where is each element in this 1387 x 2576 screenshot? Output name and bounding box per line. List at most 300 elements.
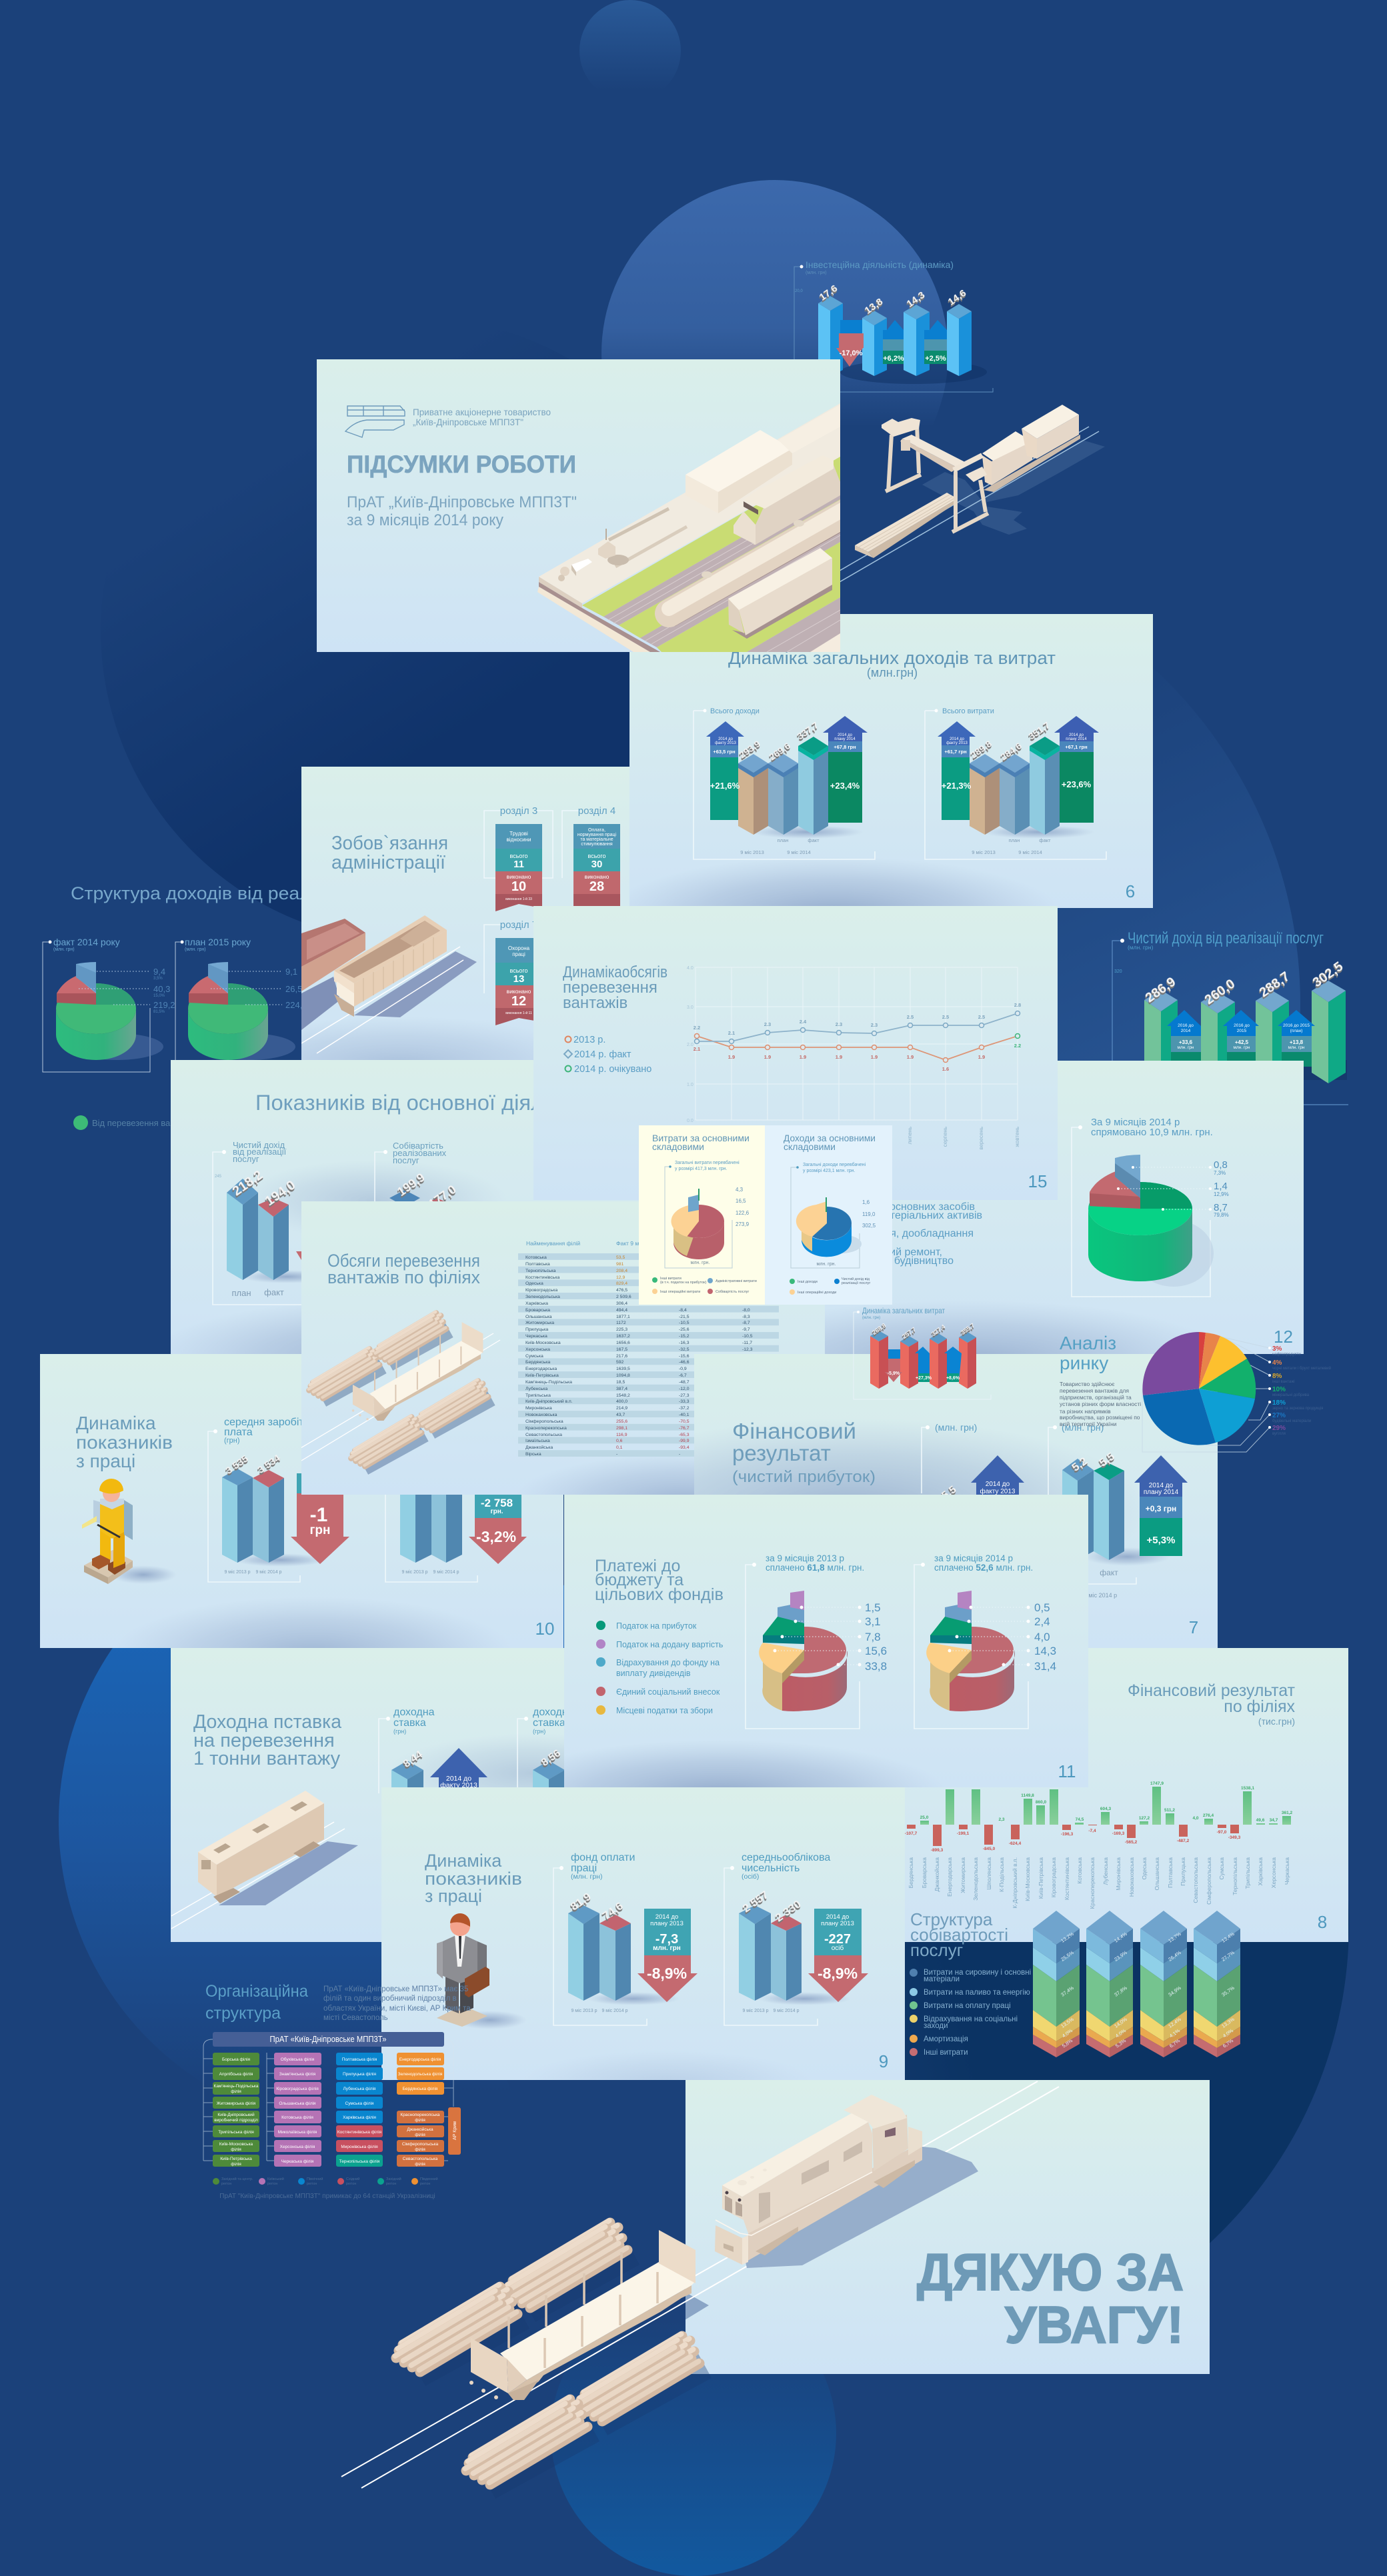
table of branches: 255,6 [616,1419,627,1424]
pie legend: вугілля [1272,1432,1286,1436]
table of branches: 306,4 [616,1301,627,1306]
floating chart: investment dynamics [794,259,993,392]
table of branches: -0,9 [679,1367,687,1371]
chart: fact vs 2013 [922,1422,1024,1502]
legend: Амортизація [924,2035,968,2043]
pie legend: зерно та зернова продукція [1272,1407,1323,1411]
chart: rate vs plan: (грн) [533,1728,545,1735]
chart: total expenses: 9 міс 2013 [972,849,996,855]
chart: total income: +67,8 грн [834,744,856,750]
table of branches: Севастопольська [525,1433,562,1437]
stacked bar percentages: 6,7% [1222,2037,1234,2049]
table of branches: 208,4 [616,1269,627,1273]
legend: Інші витрати [924,2049,968,2057]
table of branches: Херсонська [525,1347,550,1352]
bar chart: -899,3 [931,1848,944,1853]
heading [910,1909,1008,1960]
chart: average headcount: 9 міс 2014 р [773,2008,800,2013]
floating block: market analysis [1060,1332,1331,1452]
page number: 7 [1189,1617,1198,1637]
pie: fact 2014 [43,937,175,1072]
bar chart: -169,3 [1112,1831,1125,1836]
arrow callout: minus one hryvnia: -1 [310,1504,327,1526]
table of branches: 476,5 [616,1288,627,1293]
wagon shadow [685,2292,709,2320]
legend: Витрати на оплату праці [924,2002,1011,2010]
legends [652,1277,870,1295]
table of branches: 1172 [616,1321,626,1325]
table of branches: -70,5 [679,1419,689,1424]
column 3 branches: Харківська філія [343,2115,376,2120]
table of branches: -8,0 [742,1308,750,1313]
table of branches: -27,3 [679,1393,689,1398]
line chart: 2.1 [694,1046,700,1052]
org connectors [203,2039,453,2161]
expenses chart: 122,6 [736,1210,750,1216]
section 4 card: виконано [585,873,609,880]
line chart: 1.9 [871,1054,878,1060]
branch names: Шполянська [986,1857,992,1890]
chart: nine months 2014: 4,0 [1034,1631,1050,1643]
column 1 branches: Кам'янець-Подільська [214,2083,259,2089]
table of branches: -10,5 [679,1321,689,1325]
heading: 1 тонни вантажу [193,1748,341,1769]
column 4 branches: філія [415,2147,425,2152]
heading: з праці [425,1886,482,1906]
chart: average headcount: 2 330 [773,1898,804,1924]
paragraph: всій території України [1060,1421,1117,1427]
table of branches: -93,4 [679,1445,689,1450]
stacked bar percentages: 13,7% [1167,1931,1182,1944]
locomotive [754,465,840,545]
table of branches: Лубенська [525,1386,547,1391]
stacked bars [1033,1911,1240,2057]
chart: net income from services: від реалізації [233,1147,287,1157]
growth arrows: 2016 до 2015 [1283,1023,1310,1028]
arrow callout: minus 3.2 percent: -2 758 [481,1497,513,1509]
chart: rate vs plan: доходна [533,1707,574,1718]
org legend: Південний [420,2177,438,2181]
paragraph: установ різних форм власності [1060,1401,1141,1407]
branch names: Трипільська [1244,1857,1251,1889]
page number: 15 [1028,1171,1047,1191]
callout: payroll change: плану 2013 [650,1920,683,1927]
table of branches: Миронівська [525,1405,552,1411]
chart: fact vs 2013: (млн. грн) [935,1422,977,1433]
subtitle [347,493,577,529]
expenses chart: 16,5 [736,1198,746,1204]
line chart: 2.5 [978,1014,985,1020]
table of branches: 1877,1 [616,1315,630,1319]
value labels: 127,2 [1139,1816,1150,1821]
heading: показників [76,1432,173,1453]
chart: total income: 337,7 [795,719,820,742]
bar chart: -196,3 [1061,1832,1074,1837]
floating chart: net income [1112,929,1348,1105]
line chart: 2.5 [907,1014,914,1020]
chart: nine months 2013: 33,8 [865,1660,887,1673]
heading: ринку [1060,1353,1108,1373]
heading [595,1557,724,1604]
chart: nine months 2013: за 9 місяців 2013 р [766,1553,844,1563]
bar chart: -624,4 [1009,1841,1022,1846]
table of branches: 217,6 [616,1354,627,1359]
legend: Від перевезення вантажів [92,1118,196,1128]
section 7 card: 13 [513,973,524,985]
income heading [784,1133,876,1152]
chart: total expenses: плану 2014 [1066,737,1087,741]
table of branches: Факт 9 міс [616,1240,643,1247]
line chart: 1.9 [728,1054,735,1060]
income heading: складовими [784,1141,836,1152]
arrow callout: minus 3.2 percent [469,1495,527,1564]
chart: total expenses: 351,7 [1026,719,1052,742]
line chart: 1.0 [687,1083,694,1087]
heading: Структура [910,1909,993,1929]
section 7 card: 12 [511,994,526,1009]
bar values: 14,6 [946,287,968,308]
pie: plan 2015: 9,1 [285,967,297,977]
stacked bar percentages: 26,4% [1167,1949,1182,1963]
value labels: 4,0 [1192,1816,1199,1821]
arrow callout: plus 5.3 percent: 2014 до [1149,1482,1174,1489]
expenses heading: складовими [652,1141,704,1152]
chart: total income: плану 2014 [834,737,856,741]
floating chart: total expenses dynamics: Динаміка загальних витрат [862,1306,945,1315]
chart: total income: 2014 до [838,733,853,737]
table of branches: 225,3 [616,1327,627,1332]
line chart: серпень [942,1127,948,1147]
table of branches: 116,9 [616,1433,627,1437]
chart: net income from services: Чистий дохід [233,1140,285,1150]
chart: second salary chart: 9 міс 2014 р [433,1569,459,1575]
bar values [1143,959,1346,1007]
column 3 branches: Костянтинівська філія [337,2129,382,2135]
chart: second salary chart: 9 міс 2013 р [401,1569,428,1575]
section 7 card: виконано [507,988,531,995]
heading [205,1982,308,2023]
column 1 branches [213,2053,259,2167]
heading: Організаційна [205,1982,308,2001]
floating chart: cost structure [910,1909,1240,2057]
table of branches: Сумська [525,1354,543,1359]
column 3 branches: Полтавська філія [342,2057,377,2062]
heading: (тис.грн) [1258,1716,1295,1727]
pie: plan 2015: план 2015 року [185,937,251,947]
value labels: 860,0 [1036,1800,1047,1805]
slide 7: financial result [560,1354,1218,1648]
bar chart: -97,0 [1217,1830,1227,1835]
column 1 branches: Житомирська філія [217,2101,256,2106]
heading: Обсяги перевезення [327,1251,480,1271]
stacked bar percentages: 27,7% [1220,1949,1236,1963]
value labels: 34,7 [1270,1818,1278,1823]
chart: total income: 293,9 [737,738,762,761]
pie: plan 2015: (млн. грн) [185,947,206,952]
column 1 branches: Київ-Московська [219,2142,253,2147]
column 4 branches: Севастопольська [403,2157,438,2161]
paragraph: підприємств, організацій та [1060,1394,1132,1401]
table of branches: 1548,2 [616,1393,630,1398]
paragraph [1060,1381,1141,1427]
table of branches: -65,3 [679,1433,689,1437]
illustration: hopper wagons [301,915,477,1053]
heading: по філіях [1224,1697,1295,1716]
section 4 card: та матеріальне [580,837,613,842]
chart: average headcount [724,1852,851,2025]
table of branches: -12,3 [742,1347,753,1352]
column 1 branches: філія [231,2089,241,2094]
table of branches: Зеленодольська [525,1295,560,1299]
chart: fact vs plan [1048,1422,1170,1599]
head company box: ПрАТ «Київ-Дніпровське МПП3Т» [269,2034,387,2044]
column 2 branches: Ольшанська філія [279,2101,316,2106]
line chart: 1.9 [907,1054,914,1060]
section 7 bracket [484,925,501,993]
value labels: 74,5 [1076,1817,1084,1822]
page number: 12 [1274,1327,1293,1347]
slide: income rate per tonne [171,1648,694,1942]
chart: nine months 2014: сплачено 52,6 млн. грн. [934,1563,1033,1573]
small crane and crates [615,527,687,567]
legend [564,1035,651,1075]
bar chart [905,1781,1293,1909]
illustration: railway terminal [537,403,847,652]
table of branches: 829,4 [616,1281,627,1286]
heading [331,833,448,873]
heading: показників [425,1869,522,1889]
axis frame [794,267,993,392]
small panel: expenses and income by components [639,1125,892,1305]
callouts [836,320,947,367]
expenses heading: Витрати за основними [652,1133,750,1143]
section 3 card [495,824,542,911]
chart: total income: факт [808,837,820,843]
heading [76,1413,173,1471]
table of branches: -40,1 [679,1413,689,1417]
bar chart: -7,4 [1088,1829,1096,1833]
chart: total expenses: +21,3% [942,781,972,791]
chart: rate vs 2013 [379,1707,487,1793]
table of branches: -25,6 [679,1327,689,1332]
table of branches: 1637,2 [616,1334,630,1339]
chart: total income: +23,4% [830,781,860,791]
table of branches: -9,7 [742,1327,750,1332]
line chart: 2.3 [764,1021,771,1027]
line chart: 2.8 [1014,1002,1021,1008]
org legend: регіон [221,2182,231,2186]
chart: nine months 2013: 7,8 [865,1631,881,1643]
legend [596,1621,723,1715]
section 7 label: розділ 7 [500,919,537,931]
branch names: Сумська [1218,1857,1225,1879]
heading [1128,1681,1296,1727]
floating chart: total expenses dynamics: 327,4 [930,1323,946,1337]
pie: fact 2014: 81,5% [153,1010,165,1014]
heading: результат [732,1441,831,1465]
chart: fact vs plan: (млн. грн) [1062,1422,1104,1433]
thank-you text: УВАГУ! [1005,2295,1184,2354]
heading [732,1419,876,1486]
illustration: flat wagon with logs [301,1312,500,1467]
chart: average headcount: (осіб) [742,1873,759,1881]
head company box [213,2032,444,2047]
value labels: 25,0 [920,1815,929,1820]
list of investment types: та нематеріальних активів [852,1210,982,1221]
section 7 card [495,938,533,1025]
branch names: Зеленодольська [972,1857,979,1901]
chart: fact vs 2013: факту 2013 [980,1487,1016,1495]
bar values: 14,3 [905,289,927,310]
callout: payroll change: млн. грн [653,1945,681,1952]
chart: total expenses: 2014 до [1069,733,1084,737]
table of branches: 43,7 [616,1413,625,1417]
chart: nine months 2013: 1,5 [865,1601,881,1614]
section 4 bracket [562,811,579,878]
line chart: 2.2 [694,1025,700,1031]
org legend: регіон [346,2182,356,2186]
chart: cost of services [375,1141,459,1212]
bar values: 13,8 [863,296,885,317]
table of branches: Вірська [525,1451,541,1457]
table of branches: 494,4 [616,1308,627,1313]
stacked bar percentages: 13,2% [1060,1931,1075,1944]
table of branches: 12,9 [616,1275,625,1280]
table of branches: - [679,1452,680,1457]
legend: Податок на прибуток [616,1621,697,1631]
column 3 branches: Прилуцька філія [343,2071,376,2077]
branch names: Миронівська [1115,1857,1122,1891]
section 7 card: праці [512,951,525,957]
pie: fact 2014: 3,5% [153,977,163,981]
pie: plan 2015: 26,5 [285,984,302,994]
callouts: +2,5% [925,355,946,363]
list of investment types: Капітальний ремонт, [841,1247,942,1258]
growth arrows: 2016 до [1234,1023,1250,1028]
org legend: Західний та центр. [221,2177,253,2181]
table of branches: -16,3 [679,1341,689,1345]
stacked bar percentages: 4,0% [1114,2027,1127,2039]
chart: payroll fund: 9 міс 2013 р [571,2008,597,2013]
chart: average salary: плата [224,1427,253,1438]
branch names: Черкаська [1284,1857,1290,1885]
stacked bar percentages: 25,5% [1060,1949,1075,1963]
table of branches: Харківська [525,1301,548,1306]
pie: fact 2014: 219,2 [153,1000,175,1010]
column 2 branches: Черкаська філія [281,2159,314,2164]
callouts: +6,2% [883,355,904,363]
chart: rate vs 2013: 2014 до [446,1775,471,1783]
slide 11: budget payments [493,1495,1088,1847]
branch names: Сімферопольська [1206,1857,1212,1905]
floating chart: total expenses dynamics: +8,6% [946,1376,960,1381]
pie: fact 2014: 40,3 [153,984,170,994]
column 3 branches: Тернопільська філія [339,2159,380,2164]
value labels: 2,3 [998,1817,1005,1822]
table of branches: -15,2 [679,1334,689,1339]
column 4 branches: Джанкойська [407,2127,433,2132]
branch names [908,1857,1290,1909]
page number: 8 [1318,1912,1327,1932]
floating chart: net income: 320 [1114,969,1122,974]
table of branches: Черкаська [525,1334,547,1339]
chart: payroll fund: 81,9 [568,1890,593,1913]
chart: net income from services: 218,2 [230,1168,265,1199]
table of branches: 1094,8 [616,1373,630,1378]
pie legend: 3% [1272,1345,1282,1353]
leader lines [1142,1333,1270,1452]
heading [193,1711,342,1769]
callout: headcount change: осіб [832,1944,844,1952]
chart: nine months 2013 [746,1553,887,1729]
arrow callout: minus 3.2 percent: -3,2% [476,1528,516,1545]
stacked bar percentages: 13,5% [1060,2016,1075,2029]
column 1 branches: Трипільська філія [218,2129,254,2135]
stacked bar percentages: 34,9% [1167,1985,1182,1998]
pie legend: 29% [1272,1425,1286,1432]
heading: Аналіз [1060,1333,1116,1353]
growth arrows: +13,8 [1290,1039,1304,1045]
table of branches: -99,9 [679,1439,689,1443]
branch names: Котовська [1076,1857,1083,1884]
pie: fact 2014: (млн. грн) [53,947,75,952]
list of investment types: капітальне будівництво [838,1255,954,1267]
bar chart: -565,2 [1125,1840,1138,1845]
chart: rate vs plan: 8,56 [539,1747,563,1769]
legend: матеріали [924,1975,960,1983]
heading [1060,1333,1116,1373]
org legend: Північний [307,2177,323,2181]
heading: цільових фондів [595,1585,724,1604]
chart: rate vs 2013: 8,44 [401,1749,425,1770]
closing slide [685,2080,1210,2374]
heading: (чистий прибуток) [732,1468,876,1486]
branch names: Одеська [1141,1857,1148,1879]
table of branches: 1639,5 [616,1367,630,1371]
line chart: липень [907,1127,913,1145]
heading [425,1851,522,1906]
chart: total income: 2014 до [718,737,734,741]
branch names: Київ-Московська [1024,1857,1031,1901]
paragraph: ПрАТ «Київ-Дніпровське МПП3Т» має 35 [323,1985,468,1993]
chart: fact vs 2013: 2014 до [986,1481,1010,1488]
callout: headcount change: плану 2013 [821,1920,854,1927]
pie legend: 8% [1272,1373,1282,1380]
legends: Інші доходи [798,1280,818,1284]
table of branches: Прилуцька [525,1327,548,1332]
column 4 branches: філія [415,2117,425,2123]
bars [1144,981,1346,1083]
line chart: 2.4 [800,1019,807,1025]
table of branches: 214,9 [616,1406,627,1411]
callout: payroll change: -7,3 [655,1932,678,1947]
table of branches: -76,7 [679,1426,689,1431]
bar values: 288,7 [1257,969,1292,1000]
branch names: Харківська [1257,1857,1264,1885]
page number: 9 [879,2051,888,2071]
chart: average salary: середня заробітна [224,1417,316,1428]
table of branches: -21,5 [679,1315,689,1319]
company name [413,407,551,427]
chart: nine months 2014: 0,5 [1034,1601,1050,1614]
chart: payroll fund: праці [571,1863,597,1874]
income chart: млн. грн. [817,1262,836,1267]
chart: total income: +63,5 грн [713,749,736,755]
chart: payroll fund [553,1852,680,2025]
line chart: 2.2 [1014,1043,1021,1049]
chart: total expenses [925,707,1106,859]
paragraph [323,1985,471,2022]
